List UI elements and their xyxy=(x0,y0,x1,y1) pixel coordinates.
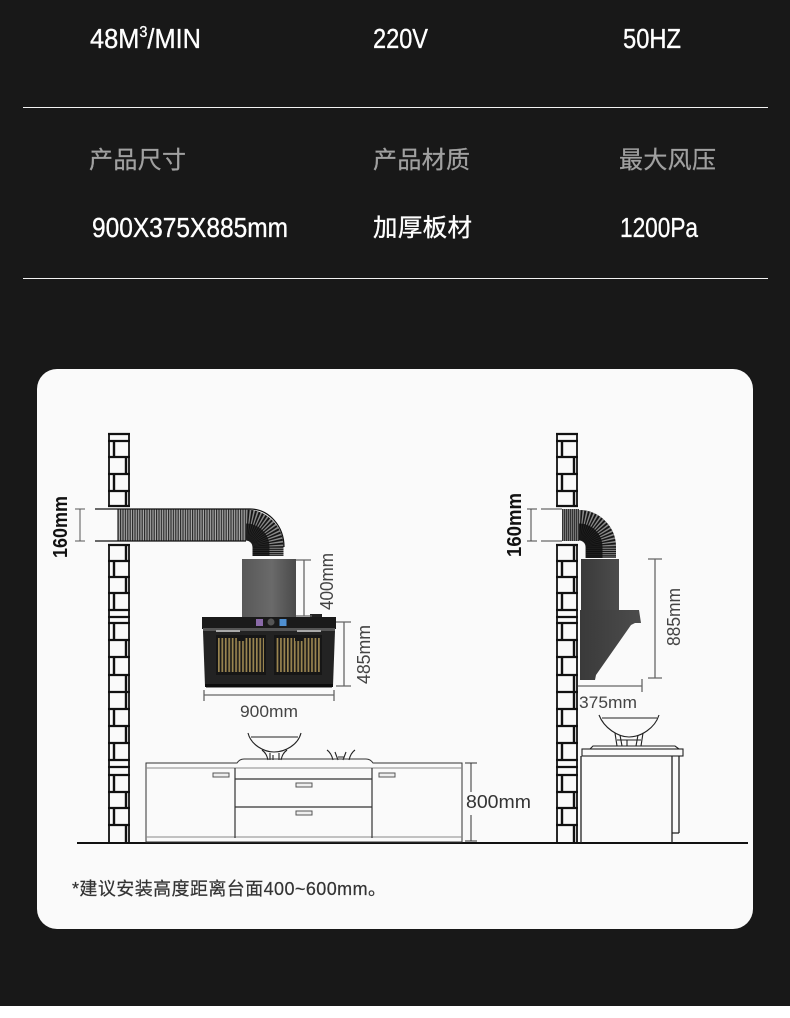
dimension: 485mm xyxy=(336,622,374,686)
spec row 2 labels xyxy=(89,147,716,174)
brick wall: front view xyxy=(108,434,130,843)
spec row 2 values: 900X375X885mm xyxy=(92,212,288,243)
dimension: 400mm: 400mm xyxy=(317,553,337,610)
duct: side view xyxy=(562,509,601,558)
dimension: 885mm xyxy=(648,559,684,678)
dimension: 160mm side: 160mm xyxy=(504,493,526,557)
dimension: 375mm: 375mm xyxy=(579,693,637,712)
dimension: 900mm: 900mm xyxy=(240,702,298,721)
floor line xyxy=(77,842,748,844)
cabinet handles xyxy=(213,773,395,815)
spec row 2 values xyxy=(92,212,698,243)
dimension: 160mm front xyxy=(50,496,85,558)
duct: front view xyxy=(95,509,284,556)
pot on stove: front view xyxy=(248,733,301,760)
dimension: 900mm xyxy=(204,690,334,721)
panel: installation diagram xyxy=(37,369,753,929)
kitchen cabinet: front view xyxy=(146,759,462,842)
dimension: 160mm front: 160mm xyxy=(50,496,72,558)
dimension: 885mm: 885mm xyxy=(664,588,684,646)
spec row 2 values: 1200Pa xyxy=(620,212,698,243)
spec row 1 values xyxy=(90,23,681,54)
spec row 2 values: 加厚板材 xyxy=(373,214,472,242)
spec row 1 values: 50HZ xyxy=(623,23,681,54)
spec row 1 values: /MIN xyxy=(147,23,201,54)
control panel buttons xyxy=(256,618,286,626)
installation note: *建议安装高度距离台面400~600mm。 xyxy=(72,879,386,899)
burner: front view xyxy=(327,750,355,760)
spec row 2 labels: 产品尺寸 xyxy=(89,147,186,174)
dimension: 160mm side xyxy=(504,493,562,557)
spec table dividers xyxy=(23,107,768,279)
brick wall: side view xyxy=(556,434,578,843)
range hood: side view xyxy=(580,559,641,680)
pot and cabinet: side view xyxy=(581,715,683,843)
dimension: 800mm xyxy=(465,763,531,841)
spec row 2 labels: 产品材质 xyxy=(373,147,470,174)
dimension: 400mm xyxy=(296,553,337,616)
spec row 1 values: 48M xyxy=(90,23,144,54)
dimension: 375mm xyxy=(578,679,642,712)
spec row 1 values: 3 xyxy=(139,24,148,41)
range hood: front view xyxy=(202,559,336,688)
dimension: 800mm: 800mm xyxy=(466,792,531,812)
spec row 2 labels: 最大风压 xyxy=(619,147,716,174)
dimension: 485mm: 485mm xyxy=(354,625,374,684)
spec row 1 values: 220V xyxy=(373,23,428,54)
